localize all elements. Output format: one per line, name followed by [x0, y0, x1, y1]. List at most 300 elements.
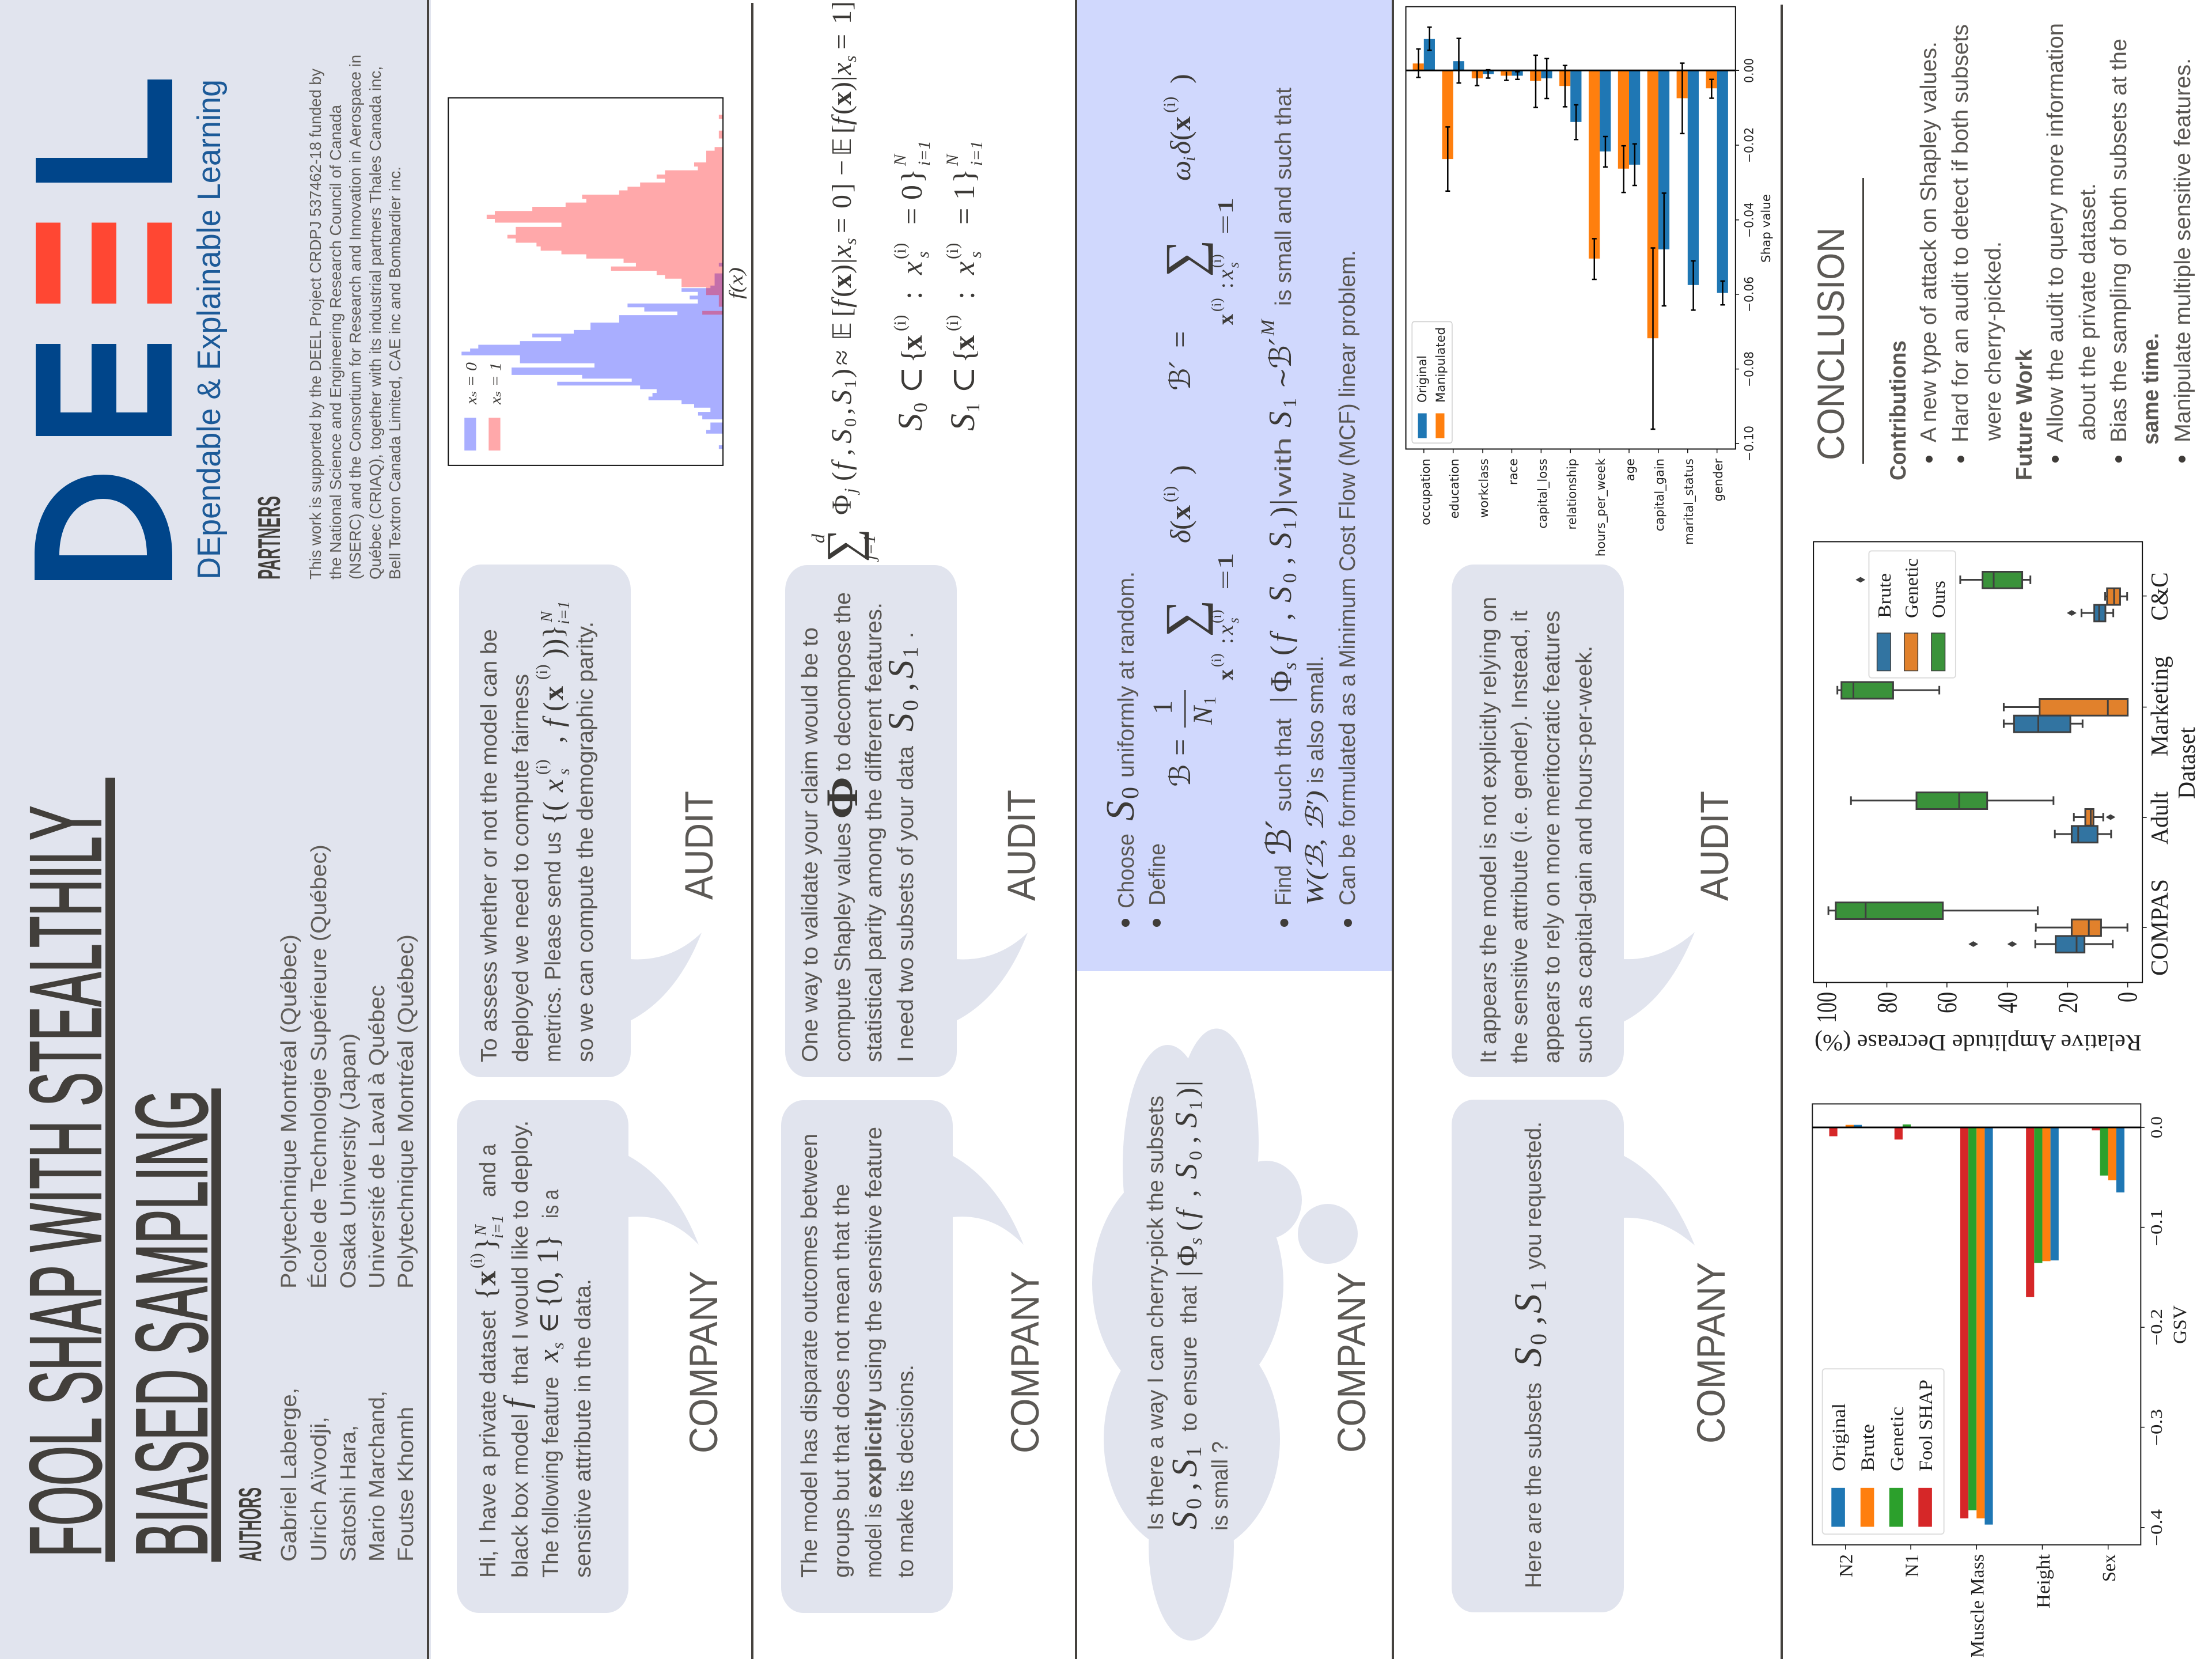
company 4 text: 1 [1525, 1280, 1551, 1291]
audit 2 text: 1 [899, 647, 923, 658]
formula: weighted barycenter B prime: =1 [1214, 197, 1238, 234]
step: choose S0: Define [1145, 843, 1170, 906]
authors: Polytechnique Montréal (Québec) [277, 934, 301, 1289]
GSV chart labels: Sex [2099, 1554, 2120, 1582]
formula: weighted barycenter B prime [1154, 74, 1242, 391]
thought text: f [1171, 1207, 1203, 1218]
audit 1 text: ( [537, 702, 569, 711]
formula: weighted barycenter B prime: i [1180, 157, 1199, 161]
step: find B prime: 1 [1279, 520, 1301, 530]
audit 1 text: , [537, 736, 569, 743]
thought text: S [1165, 1459, 1205, 1477]
formula: Shapley decomposition: ( [827, 288, 857, 297]
formula: subset S0: { [896, 349, 929, 363]
formula: Shapley decomposition: ( [827, 472, 857, 481]
company 2 text: groups but that does not mean that the [830, 1184, 854, 1578]
shap chart labels: Original [1415, 355, 1429, 403]
company 4 text: Here are the subsets [1521, 1382, 1546, 1588]
formula: Shapley decomposition: S [825, 429, 857, 444]
bars: original [1854, 1125, 2124, 1525]
audit 1 text: (i) [533, 760, 551, 775]
authors: Mario Marchand, [365, 1391, 389, 1562]
company label 3: COMPANY [1330, 1272, 1374, 1453]
audit 2 text: , [882, 683, 921, 691]
step: find B prime: such that [1271, 718, 1296, 812]
audit 1 text: s [555, 768, 573, 775]
box plot labels: 80 [1871, 992, 1903, 1013]
thought text: S [1169, 1164, 1203, 1179]
audit 1 text: i=1 [555, 601, 573, 624]
formula: subset S0 [891, 141, 934, 431]
formula: subset S0: (i) [891, 315, 910, 331]
company label 4: COMPANY [1689, 1262, 1733, 1444]
speech bubble: audit 2 [785, 565, 1044, 1077]
formula: Shapley decomposition: ] [827, 1, 857, 10]
formula: Shapley decomposition: ] [827, 183, 857, 192]
bars: manipulated [1413, 63, 1717, 338]
authors: Gabriel Laberge, [277, 1388, 301, 1562]
shap chart labels: occupation [1419, 459, 1433, 525]
step: choose S0: uniformly at random. [1114, 571, 1139, 778]
title: BIASED SAMPLING [116, 1090, 229, 1557]
audit 2 text: to decompose the [831, 592, 855, 771]
company 2 text: using the sensitive feature [862, 1127, 887, 1393]
shap chart labels: Manipulated [1434, 327, 1448, 403]
formula: Shapley decomposition: ) [827, 82, 857, 91]
legend box [1869, 551, 1956, 678]
partners: This work is supported by the DEEL Project CRDPJ 537462-18 funded by [306, 69, 324, 579]
company 1 text: that I would like to deploy. [508, 1120, 533, 1385]
formula: weighted barycenter B prime: ω [1164, 161, 1196, 181]
outliers [1855, 577, 2115, 947]
thought text: 0 [1182, 1498, 1206, 1509]
formula: weighted barycenter B prime: ( [1164, 131, 1196, 141]
audit 2 text: statistical parity among the different features. [862, 603, 887, 1062]
formula: Shapley decomposition: x [827, 245, 857, 258]
formula: Shapley decomposition: x [827, 63, 857, 75]
formula: barycenter B: 1 [1200, 696, 1219, 705]
audit 1 text: (i) [533, 665, 551, 680]
step: find B prime: ( [1265, 646, 1298, 656]
step: find B prime: | [1265, 697, 1298, 703]
thought text: , [1166, 1483, 1204, 1491]
audit 2 text: compute Shapley values [831, 823, 855, 1062]
contributions and future work [1886, 23, 2195, 480]
thought text: , [1171, 1190, 1203, 1197]
thought text: 1 [1185, 1101, 1206, 1110]
step: find B prime: W(ℬ, ℬ′) [1302, 790, 1329, 906]
company 1 text: s [548, 1342, 567, 1349]
company label 2: COMPANY [1003, 1271, 1047, 1453]
formula: Shapley decomposition: = [827, 34, 857, 50]
formula: subset S0: : [896, 291, 929, 300]
formula: subset S0: ⊂ [893, 366, 929, 393]
company 1 text: ∈ [532, 1312, 565, 1334]
formula: barycenter B: 1 [1147, 700, 1178, 714]
formula: subset S1: S [944, 414, 982, 431]
shap chart labels: race [1506, 459, 1520, 485]
step: find B prime: S [1263, 586, 1298, 603]
thought text: Φ [1171, 1245, 1203, 1266]
audit 1 text: so we can compute the demographic parity. [573, 622, 598, 1062]
panel: algorithm text [1099, 74, 1360, 927]
formula: Shapley decomposition: x [827, 92, 857, 105]
formula: Shapley decomposition: 𝔼 [828, 138, 857, 156]
title [9, 778, 229, 1562]
formula: weighted barycenter B prime: x [1214, 314, 1238, 325]
GSV chart labels: N1 [1902, 1554, 1923, 1577]
GSV chart labels: N2 [1836, 1554, 1857, 1577]
formula: Shapley decomposition: s [841, 55, 860, 62]
step: find B prime: is also small. [1304, 656, 1328, 783]
formula: barycenter B: = [1164, 739, 1197, 756]
audit 1 text: f [537, 715, 569, 727]
GSV chart labels: GSV [2170, 1305, 2191, 1344]
company 4 text: S [1506, 1294, 1550, 1313]
formula: Shapley decomposition: 𝔼 [828, 322, 857, 340]
formula: subset S0: i=1 [915, 141, 934, 166]
thought text: | [1171, 1081, 1203, 1086]
formula: Shapley decomposition: 1 [841, 380, 860, 388]
contributions and future work: A new type of attack on Shapley values. [1916, 41, 1941, 442]
authors: École de Technologie Supérieure (Québec) [306, 844, 331, 1289]
formula: barycenter B [1147, 465, 1242, 787]
thought text: to ensure that [1177, 1286, 1202, 1431]
formula: subset S1 [943, 141, 986, 431]
thought text: , [1171, 1136, 1203, 1143]
thought text: 0 [1185, 1151, 1206, 1160]
formula: barycenter B: x [1214, 625, 1238, 635]
thought text [1143, 1081, 1233, 1531]
audit label 2: AUDIT [999, 790, 1044, 901]
formula: Shapley decomposition: j=1 [860, 535, 879, 562]
formula: subset S0: = [896, 208, 929, 225]
panel: header sidebar [0, 0, 431, 1659]
audit 2 text: One way to validate your claim would be to [798, 627, 823, 1062]
formula: barycenter B: N [1188, 704, 1218, 725]
step: find B prime: ℬ′ [1264, 338, 1298, 369]
contributions and future work: Bias the sampling of both subsets at the [2107, 39, 2131, 442]
audit 2 text: S [880, 660, 921, 679]
contributions and future work: Manipulate multiple sensitive features. [2171, 58, 2195, 442]
company 1 text: { [469, 1286, 502, 1300]
company 2 text: model is [862, 1503, 887, 1578]
company 1 text: The following feature [539, 1377, 563, 1578]
step: MCF: Can be formulated as a Minimum Cost Flow (MCF) linear problem. [1335, 250, 1360, 906]
bars: fool shap [1830, 1127, 2100, 1518]
formula: subset S1: } [948, 169, 981, 183]
step: find B prime: s [1279, 662, 1301, 670]
company 1 text: N [472, 1224, 490, 1236]
audit 2 text: I need two subsets of your data [893, 746, 918, 1062]
authors: Polytechnique Montréal (Québec) [394, 934, 418, 1289]
GSV chart labels: Height [2033, 1554, 2054, 1608]
company 4 text: 0 [1525, 1334, 1551, 1345]
formula: barycenter B: ) [1164, 465, 1196, 475]
audit label 3: AUDIT [1692, 791, 1737, 901]
shap chart labels: −0.04 [1743, 202, 1756, 238]
box plot labels: Adult [2147, 791, 2173, 844]
authors: Satoshi Hara, [336, 1425, 361, 1562]
company 4 text: , [1510, 1316, 1549, 1325]
thought cloud: company 3 [1092, 1029, 1374, 1641]
step: find B prime: M [1257, 319, 1279, 336]
formula: subset S0: (i) [891, 243, 910, 259]
chart: output histogram [448, 98, 747, 465]
formula: Shapley decomposition: j [841, 488, 860, 495]
formula: subset S0: 0 [896, 185, 929, 200]
formula: weighted barycenter B prime: s [1226, 262, 1242, 268]
company 2 text: The model has disparate outcomes between [797, 1134, 822, 1578]
formula: Shapley decomposition: f [827, 297, 857, 308]
box plot labels: Genetic [1901, 558, 1922, 618]
audit 3 text: the sensitive attribute (i.e. gender). Instead, it [1508, 611, 1532, 1063]
formula: barycenter B: x [1164, 505, 1196, 520]
formula: Shapley decomposition: 0 [841, 418, 860, 427]
bars: original [1424, 39, 1728, 293]
audit 1 text: N [538, 611, 556, 623]
step: find B prime: , [1265, 613, 1298, 620]
formula: Shapley decomposition: − [827, 160, 857, 176]
formula: Shapley decomposition: x [827, 274, 857, 288]
step: find B prime: , [1265, 557, 1298, 565]
audit 1 text [477, 601, 598, 1062]
GSV chart labels: Brute [1858, 1424, 1878, 1471]
formula: barycenter B: s [1226, 618, 1242, 623]
conclusion heading: CONCLUSION [1809, 228, 1852, 460]
company 4 text: you requested. [1521, 1122, 1546, 1270]
formula: barycenter B: : [1214, 638, 1238, 644]
audit 3 text: It appears the model is not explicitly relying on [1476, 597, 1501, 1063]
vertical dividers [427, 0, 1783, 1659]
audit 2 text: 0 [899, 700, 923, 711]
formula: Shapley decomposition: f [827, 114, 857, 125]
formula: subset S1: ⊂ [946, 366, 982, 393]
thought text: Is there a way I can cherry-pick the subsets [1143, 1096, 1168, 1531]
step: choose S0: S [1099, 801, 1143, 821]
step: find B prime: Find [1271, 865, 1296, 906]
authors: AUTHORS [232, 1487, 268, 1562]
formula: Shapley decomposition: [ [827, 124, 857, 134]
shap chart labels: capital_gain [1653, 459, 1667, 531]
speech bubble: company 2 [781, 1100, 1047, 1613]
formula: subset S0: x [896, 335, 929, 350]
GSV chart labels: −0.3 [2148, 1409, 2166, 1446]
formula: barycenter B: (i) [1209, 609, 1225, 623]
formula: barycenter B: =1 [1214, 552, 1238, 590]
step: choose S0: Choose [1114, 834, 1139, 908]
formula: weighted barycenter B prime: ∑ [1154, 239, 1213, 277]
shap chart labels [1415, 58, 1773, 556]
partners: Québec (CRIAQ), together with its industrial partners Thales Canada inc, [366, 66, 384, 579]
thought text: 1 [1182, 1446, 1206, 1457]
step: find B prime: ℬ′ [1259, 820, 1300, 855]
shap chart labels: hours_per_week [1594, 458, 1608, 556]
formula: Shapley decomposition [808, 1, 879, 562]
box plot labels: Dataset [2174, 727, 2200, 799]
box plot labels: 20 [2052, 992, 2084, 1013]
chart: shap value bar chart [1406, 6, 1773, 556]
partners: Bell Textron Canada Limited, CAE inc and Bombardier inc. [386, 166, 404, 579]
formula: subset S1: N [943, 153, 962, 166]
formula: Shapley decomposition: ≈ [827, 350, 857, 365]
GSV chart labels: −0.2 [2148, 1309, 2166, 1346]
formula: barycenter B: x [1214, 669, 1238, 680]
contributions and future work: Allow the audit to query more information [2043, 23, 2068, 442]
speech bubble: company 1 [457, 1100, 726, 1613]
logo: DEEL [35, 79, 172, 580]
GSV chart labels: Muscle Mass [1968, 1554, 1988, 1658]
step: choose S0 [1099, 571, 1170, 908]
boxes: genetic [2040, 588, 2128, 936]
audit 1 text: To assess whether or not the model can be [477, 629, 502, 1062]
audit 3 text [1476, 597, 1597, 1063]
formula: subset S1: (i) [943, 315, 962, 331]
audit 1 text: {( [537, 801, 569, 825]
audit 2 text: . [893, 632, 918, 638]
formula: subset S0: s [914, 251, 933, 258]
GSV chart labels: Genetic [1887, 1407, 1908, 1471]
contributions and future work: same time. [2138, 333, 2164, 445]
formula: subset S0: S [891, 414, 929, 431]
formula: Shapley decomposition: ( [827, 105, 857, 115]
logo tagline: DEpendable & Explainable Learning [191, 79, 228, 579]
box plot labels: 60 [1931, 992, 1963, 1013]
step: find B prime: 0 [1279, 573, 1301, 583]
company 1 text: Hi, I have a private dataset [476, 1310, 501, 1578]
formula: Shapley decomposition: ∑ [817, 529, 869, 562]
formula: Shapley decomposition: d [808, 533, 828, 543]
audit 1 text: ))} [537, 625, 569, 658]
step: find B prime: 1 [1279, 398, 1301, 408]
chart: output histogram: f(x) [726, 267, 747, 299]
shap chart labels: marital_status [1682, 459, 1696, 545]
formula: Shapley decomposition: Φ [827, 495, 857, 515]
GSV chart labels: Original [1829, 1403, 1850, 1471]
company 1 text: f [497, 1395, 535, 1408]
company 1 text: x [532, 1350, 565, 1363]
partners: PARTNERS [251, 496, 287, 579]
partners: the National Science and Engineering Research Council of Canada [327, 105, 344, 579]
shap chart labels: gender [1711, 459, 1725, 501]
box plot labels: Marketing [2147, 656, 2173, 756]
company 1 text: i=1 [489, 1215, 507, 1238]
speech bubble: company 4 [1452, 1100, 1733, 1612]
box plot labels: Brute [1874, 573, 1895, 618]
audit 3 text: such as capital-gain and hours-per-week. [1572, 646, 1597, 1063]
thought text: S [1169, 1112, 1203, 1128]
company 1 text: black box model [508, 1414, 533, 1578]
boxes: ours [1836, 571, 2022, 919]
authors: Université de Laval à Québec [365, 985, 389, 1289]
shap chart labels: −0.02 [1743, 127, 1756, 163]
formula: weighted barycenter B prime: (i) [1209, 298, 1225, 312]
company 1 text [468, 1120, 596, 1578]
company 1 text: } [469, 1237, 502, 1251]
formula: barycenter B: ∑ [1154, 599, 1213, 637]
formula: subset S0: } [896, 169, 929, 183]
step: find B prime: | [1265, 499, 1298, 505]
chart: GSV bar chart [1812, 1104, 2191, 1658]
formula: weighted barycenter B prime: x [1164, 116, 1196, 131]
authors: Foutse Khomh [394, 1407, 418, 1562]
audit 1 text: deployed we need to compute fairness [509, 674, 533, 1062]
shap chart labels: Shap value [1759, 194, 1773, 263]
bars: brute [1846, 1125, 2116, 1518]
formula: Shapley decomposition: | [827, 258, 857, 264]
formula: weighted barycenter B prime: δ [1164, 141, 1196, 154]
thought text: | [1171, 1271, 1203, 1277]
partners [251, 55, 404, 579]
step: find B prime [1257, 88, 1329, 906]
title: FOOL SHAP WITH STEALTHILY [9, 806, 122, 1557]
box plot labels [1810, 558, 2200, 1023]
step: find B prime: ) [1265, 507, 1298, 517]
formula: barycenter B: ( [1164, 520, 1196, 530]
company 1 text: is a [539, 1190, 563, 1218]
shap chart labels: −0.10 [1743, 426, 1756, 461]
formula: subset S1: 1 [963, 403, 984, 412]
formula: weighted barycenter B prime: ) [1164, 74, 1196, 84]
legend box [1412, 322, 1452, 443]
formula: subset S0: 0 [910, 403, 931, 412]
thought text: s [1185, 1238, 1206, 1245]
step: choose S0: 0 [1118, 787, 1144, 799]
chart: output histogram: xₛ = 1 [487, 362, 504, 405]
conclusion [1809, 23, 2195, 480]
chart: output histogram: xₛ = 0 [463, 362, 480, 405]
formula: weighted barycenter B prime: : [1214, 282, 1238, 289]
formula: barycenter B: ℬ [1164, 764, 1197, 787]
panel: algorithm background [1077, 0, 1392, 971]
company 2 text: to make its decisions. [893, 1365, 918, 1578]
contributions and future work: about the private dataset. [2075, 183, 2100, 441]
company 2 text: explicitly [862, 1398, 887, 1498]
audit 2 text [798, 592, 923, 1062]
formula: Shapley decomposition: [ [827, 308, 857, 317]
company 1 text: x [469, 1271, 502, 1286]
formula: Shapley decomposition: , [827, 408, 857, 415]
audit label 1: AUDIT [677, 791, 721, 900]
boxes: brute [2014, 605, 2105, 953]
contributions and future work: Future Work [2012, 349, 2037, 480]
box plot labels: 40 [1991, 992, 2023, 1013]
company 4 text [1506, 1122, 1551, 1588]
formula: weighted barycenter B prime: x [1214, 270, 1238, 280]
company 1 text: and a [476, 1144, 501, 1197]
partners: (NSERC) and the Consortium for Research and Innovation in Aerospace in [346, 55, 364, 579]
step: find B prime: ∼ [1268, 368, 1297, 389]
GSV chart labels: Fool SHAP [1916, 1380, 1937, 1471]
formula: Shapley decomposition: | [827, 75, 857, 81]
audit 1 text: x [537, 686, 569, 700]
formula: weighted barycenter B prime: ℬ′ [1164, 361, 1197, 391]
company 1 text: (i) [468, 1253, 486, 1268]
shap chart labels: relationship [1565, 459, 1579, 529]
thought text: is small ? [1208, 1441, 1233, 1531]
formula: subset S1: (i) [943, 243, 962, 259]
step: find B prime: with [1271, 437, 1296, 497]
formula: Shapley decomposition: s [841, 238, 860, 245]
speech bubble: audit 3 [1452, 565, 1737, 1077]
formula: weighted barycenter B prime: (i) [1160, 97, 1179, 113]
formula: barycenter B: (i) [1160, 486, 1179, 502]
authors [232, 844, 418, 1562]
formula: Shapley decomposition: 0 [827, 195, 857, 209]
formula: Shapley decomposition: ) [827, 369, 857, 378]
thought text: ( [1171, 1221, 1203, 1231]
audit 2 text: S [880, 713, 921, 732]
